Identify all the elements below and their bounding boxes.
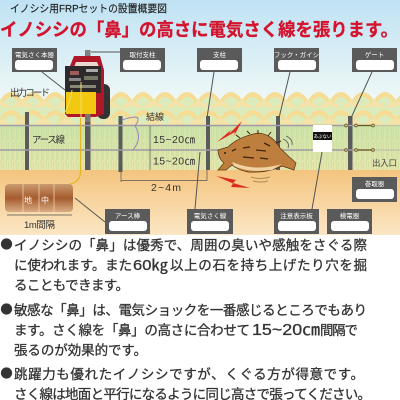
- callout: 電気さく線: 電気さく線: [194, 211, 227, 220]
- background: ground: [0, 170, 400, 235]
- dimension: 15~20cm upper: [150, 126, 196, 150]
- text block: point 1: ることもできます。: [14, 278, 129, 293]
- text block: point 2: ます。さく線を「鼻」の高さに合わせて: [14, 322, 250, 338]
- callout: 注意表示板: [274, 209, 319, 234]
- underground earth pipe: 中: [41, 195, 49, 205]
- underground earth pipe: 地: [24, 195, 32, 205]
- callout: 検電器: 検電器: [340, 211, 360, 220]
- dimension: 2~4m: [121, 165, 207, 194]
- boar motion marks: [283, 136, 292, 148]
- callout: 電気さく本器: 電気さく本器: [15, 50, 54, 59]
- text block: point 3: 跳躍力も優れたイノシシですが、くぐる方が得意です。: [14, 366, 364, 382]
- output cord: [58, 82, 81, 122]
- label: 結線: 結線: [146, 111, 164, 122]
- callout: アース棒: [105, 209, 150, 234]
- callout: 支柱: 支柱: [213, 50, 226, 59]
- callout: フック・ガイシ: フック・ガイシ: [274, 50, 319, 59]
- callout: 電気さく線: [187, 209, 233, 234]
- callout: 注意表示板: 注意表示板: [280, 211, 313, 220]
- boar shadow: [251, 177, 270, 182]
- callout: フック・ガイシ: [274, 48, 319, 72]
- text block: point 2: [1, 302, 367, 358]
- text block: point 1: 以上の石を持ち上げたり穴を掘: [170, 258, 367, 273]
- subtitle: イノシシ用FRPセットの設置概要図: [10, 2, 167, 15]
- warning sign: [313, 125, 332, 152]
- dimension: 1m間隔: [7, 215, 72, 231]
- callout: 巻取器: 巻取器: [365, 179, 385, 188]
- leader lines: [42, 52, 372, 222]
- shock lightning: bottom: [216, 176, 250, 188]
- warning sign: あぶない: [314, 133, 332, 140]
- text block: point 1: に使われます。また: [14, 257, 132, 273]
- callout: 検電器: [327, 209, 372, 234]
- callout: ゲート: ゲート: [365, 50, 384, 59]
- dimension: 15~20cm lower: [150, 150, 196, 170]
- bottom white area: [0, 235, 400, 400]
- callout: 支柱: [197, 48, 242, 72]
- underground earth pipe: [5, 184, 73, 212]
- energizer unit: [65, 56, 110, 122]
- fence posts: [25, 50, 352, 172]
- dimension: 1m間隔: 1m間隔: [24, 220, 55, 231]
- background: sky: [0, 0, 400, 110]
- callout: 電気さく本器: [12, 48, 57, 72]
- shock lightning: top: [217, 121, 242, 142]
- text block: point 1: 60㎏: [133, 257, 168, 274]
- text block: point 2: 敏感な「鼻」は、電気ショックを一番感じるところでもあり: [14, 302, 367, 318]
- text block: point 1: イノシシの「鼻」は優秀で、周囲の臭いや感触をさぐる際: [14, 237, 368, 253]
- gate hook wires: [345, 124, 400, 151]
- earth wire: [70, 118, 80, 184]
- text block: point 3: [1, 366, 371, 400]
- title: イノシシの「鼻」の高さに電気さく線を張ります。: [0, 19, 398, 40]
- callout: 巻取器: [352, 177, 397, 202]
- callout: ゲート: [352, 48, 397, 72]
- label: 出力コード: 出力コード: [10, 87, 50, 99]
- boar: [218, 130, 296, 172]
- background: corn field: [0, 92, 400, 128]
- dimension: 15~20cm lower: 15~20㎝: [153, 156, 196, 168]
- dimension: 2~4m: 2~4m: [151, 182, 181, 194]
- background: grass: [0, 125, 400, 170]
- label: アース線: アース線: [32, 134, 65, 146]
- callout: アース棒: アース棒: [115, 211, 141, 220]
- callout: 取付支柱: [120, 48, 165, 72]
- text block: point 2: 15~20㎝: [252, 322, 320, 339]
- callout: 取付支柱: 取付支柱: [130, 50, 156, 59]
- text block: point 2: 張るのが効果的です。: [14, 343, 147, 358]
- label: 出入口: 出入口: [372, 158, 397, 168]
- text block: point 2: 間隔で: [320, 323, 358, 338]
- text block: point 1: [1, 237, 368, 293]
- dimension: 15~20cm upper: 15~20㎝: [153, 134, 196, 146]
- connection wire loop: [122, 117, 139, 150]
- fence wires: [0, 126, 372, 150]
